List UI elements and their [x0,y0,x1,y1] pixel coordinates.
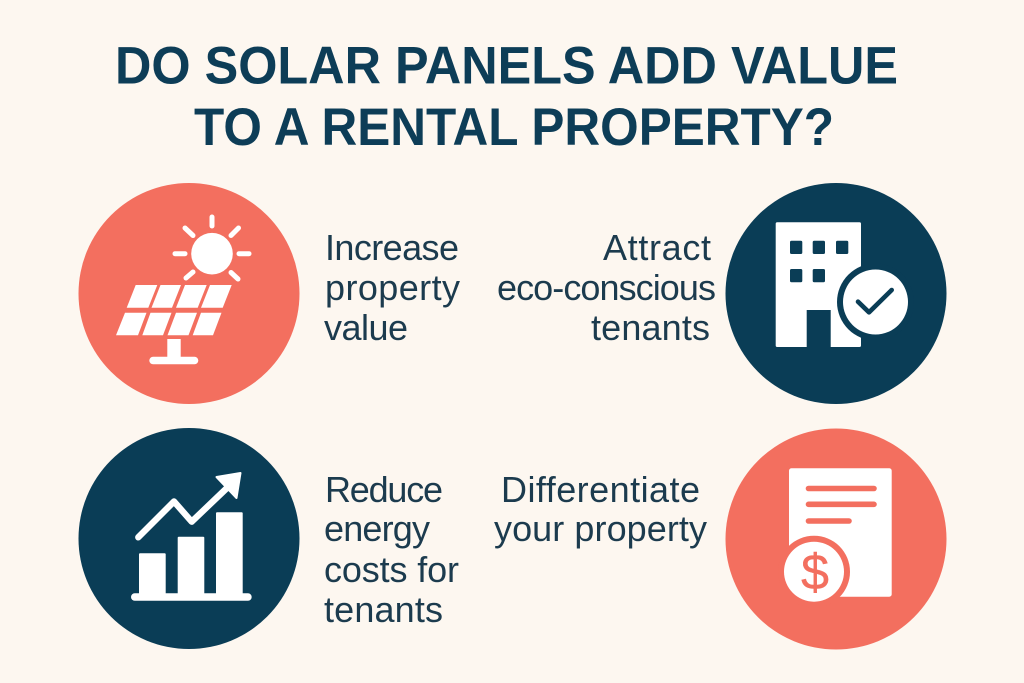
label: reduce energy costs for tenants: costs for [324,549,459,590]
label: increase property value: Increase [325,227,459,268]
label: increase property value: value [324,307,408,348]
icon: building with check badge [726,183,946,404]
label: differentiate your property: Differentiate [501,469,700,510]
label: attract eco-conscious tenants [497,227,716,348]
label: reduce energy costs for tenants [324,469,459,630]
panel: attract eco-conscious tenants [497,183,946,404]
icon: document with dollar coin [726,428,946,650]
icon: solar panel and sun [78,183,300,404]
label: increase property value: property [325,267,460,308]
label: attract eco-conscious tenants: Attract [603,227,711,268]
panel: increase property value [78,183,460,404]
label: attract eco-conscious tenants: tenants [591,307,710,348]
label: differentiate your property: your property [494,508,707,549]
panel: reduce energy costs [78,428,459,649]
label: reduce energy costs for tenants: Reduce [325,469,443,510]
label: increase property value [324,227,460,348]
icon: document with dollar coin: $ [801,544,829,600]
label: reduce energy costs for tenants: tenants [324,589,443,630]
label: attract eco-conscious tenants: eco-conscious [497,267,716,308]
title: TO A RENTAL PROPERTY? [194,98,834,157]
panel: differentiate your property [494,428,946,650]
label: reduce energy costs for tenants: energy [324,508,430,549]
title [115,36,898,157]
icon: rising bar chart with arrow [78,428,300,649]
label: differentiate your property [494,469,707,549]
title: DO SOLAR PANELS ADD VALUE [115,36,898,96]
